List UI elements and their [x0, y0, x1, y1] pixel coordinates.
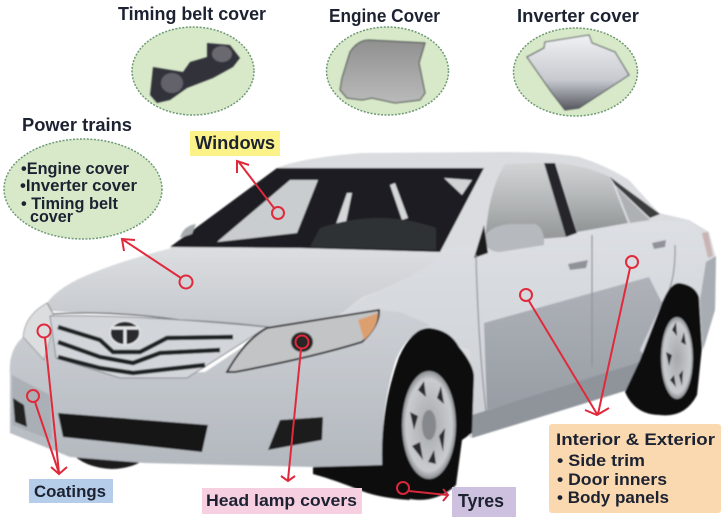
- label: Coatings: [29, 479, 113, 503]
- car photo illustration: [10, 152, 716, 500]
- rim: [661, 317, 693, 399]
- car: front wheel: [382, 328, 474, 500]
- label: Tyres: [452, 487, 516, 517]
- car: fog light recess right: [268, 417, 323, 450]
- ellipse: engine cover: [326, 27, 448, 115]
- icon: inverter cover part: [527, 35, 629, 110]
- arrow: interior from door: [520, 289, 609, 415]
- text: engine cover item: •Engine cover: [21, 159, 129, 178]
- car: rear bumper edge: [700, 256, 716, 350]
- car: rear side window: [556, 163, 628, 232]
- label: Windows: Windows: [195, 133, 275, 153]
- car: bumper left corner shade: [12, 375, 52, 440]
- car: side mirror: [484, 224, 544, 252]
- car: right headlight: [227, 310, 379, 372]
- label: Coatings: Coatings: [34, 482, 106, 501]
- text: body panels: • Body panels: [557, 488, 669, 507]
- panel: interior and exterior: [549, 424, 721, 513]
- car: rear window frame: [610, 177, 660, 218]
- arrow: head lamp covers: [281, 336, 308, 481]
- arrow: tyres: [397, 482, 448, 501]
- rim: [402, 371, 456, 479]
- ellipse: timing belt cover: [132, 27, 254, 115]
- car: left headlight: [23, 303, 53, 360]
- car: front side window: [485, 163, 566, 243]
- car: B pillar: [544, 163, 577, 237]
- car: front bumper: [10, 310, 430, 467]
- car: tail light: [702, 232, 713, 258]
- car: seat highlights: [335, 193, 352, 227]
- car: orange indicator: [358, 313, 378, 340]
- text: side trim: • Side trim: [557, 451, 645, 470]
- car: body side panels: [337, 220, 716, 433]
- text: timing belt item continued: cover: [30, 207, 73, 226]
- heading: Engine Cover: Engine Cover: [329, 6, 440, 26]
- arrow: coatings from bumper: [27, 390, 59, 473]
- heading: Power trains: Power trains: [22, 115, 132, 135]
- car: rear under-body shadow: [313, 450, 410, 500]
- text: inverter cover item: •Inverter cover: [20, 176, 137, 195]
- car: hood: [47, 248, 440, 327]
- arrow: power trains: [122, 239, 192, 288]
- text: door inners: • Door inners: [557, 470, 667, 489]
- car: fog light recess left: [13, 398, 27, 427]
- panel: power trains list: [4, 139, 162, 239]
- label: Tyres: Tyres: [458, 491, 504, 511]
- car: headlight lens: [291, 332, 313, 352]
- arrow: coatings from headlight: [38, 324, 67, 474]
- car: quarter window: [616, 187, 650, 223]
- heading: Interior & Exterior: Interior & Exterior: [556, 430, 715, 449]
- arrow: windows: [237, 161, 284, 219]
- text: timing belt item: • Timing belt: [21, 194, 118, 213]
- car: Toyota emblem: [110, 321, 140, 345]
- car: rocker panel: [472, 362, 640, 438]
- car: left mirror: [180, 224, 196, 238]
- heading: Inverter cover: Inverter cover: [517, 6, 639, 26]
- car: mirror mount: [474, 225, 488, 258]
- arrow: interior from rear door: [598, 256, 638, 414]
- ellipse: inverter cover: [514, 28, 638, 116]
- icon: timing belt cover part: [150, 43, 240, 103]
- car: door seam lines: [476, 235, 675, 412]
- car: grille: [50, 316, 267, 378]
- car: door handles: [568, 260, 588, 270]
- car: hood seam: [47, 303, 268, 327]
- car: windshield bright glass: [217, 180, 318, 242]
- car: lower door shading: [484, 277, 662, 410]
- label: Head lamp covers: Head lamp covers: [206, 491, 357, 510]
- car: lower grille opening: [58, 413, 208, 452]
- car: rear wheel: [625, 283, 702, 415]
- car: roof and upper cabin: [170, 152, 716, 438]
- heading: Timing belt cover: Timing belt cover: [118, 4, 266, 24]
- car: front under-body shadow: [70, 452, 146, 469]
- icon: engine cover part: [340, 40, 425, 103]
- car: windshield: [170, 168, 484, 252]
- label: Head lamp covers: [202, 488, 362, 514]
